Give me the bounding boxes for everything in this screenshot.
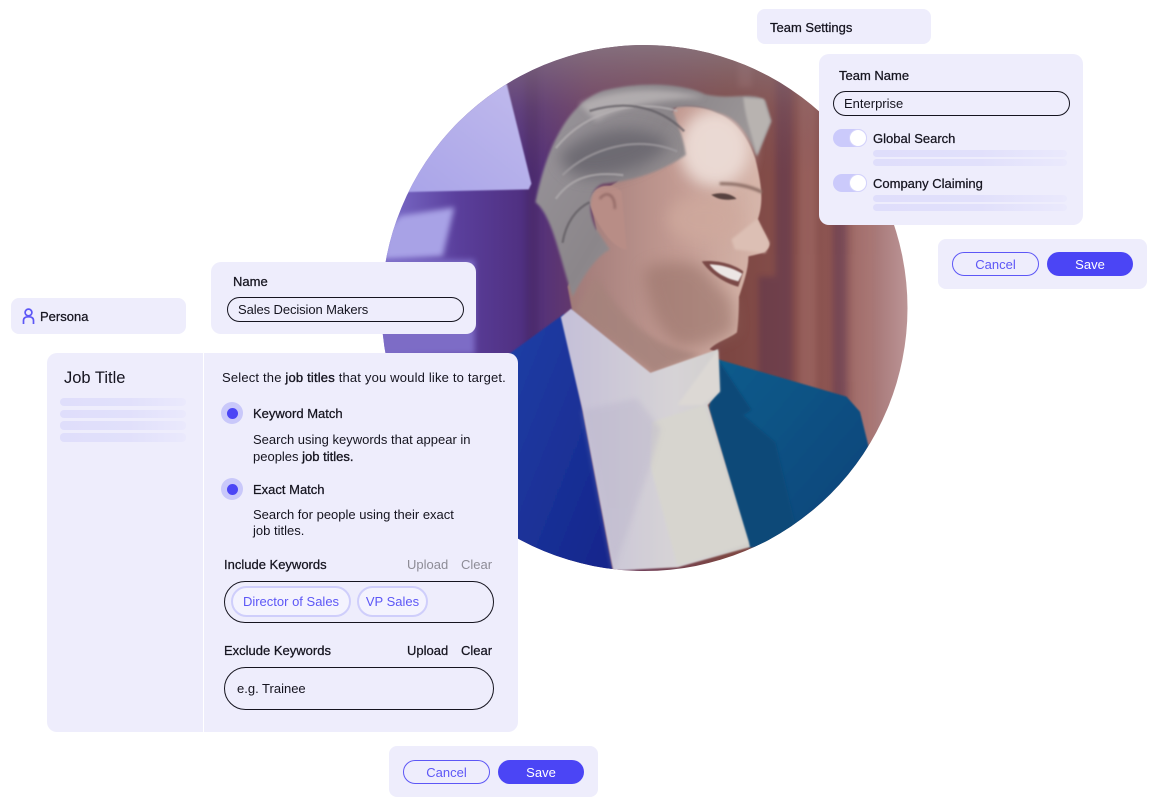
photo: smiling man in blue blazer: [382, 45, 908, 571]
label: team name: Team Name: [839, 68, 909, 83]
placeholder bars: company claiming: [873, 195, 1028, 211]
label: include keywords: Include Keywords: [224, 557, 327, 572]
cheek glow: [672, 208, 689, 230]
label: exclude keywords: Exclude Keywords: [224, 643, 331, 658]
toggle: company claiming: [833, 174, 867, 192]
description: keyword match: [253, 432, 471, 464]
description: keyword match: peoples job titles.: [253, 449, 353, 464]
button: save: [498, 760, 584, 784]
label: name: Name: [233, 274, 268, 289]
action: clear disabled: Clear: [461, 557, 492, 572]
panel: team settings tab: [757, 9, 931, 44]
radio: exact match: [221, 478, 243, 500]
instruction text: Select the job titles that you would like to target.: [222, 370, 506, 385]
label: keyword match: Keyword Match: [253, 406, 343, 421]
button: cancel: [403, 760, 490, 784]
button: cancel: [952, 252, 1039, 276]
description: exact match: job titles.: [253, 523, 304, 538]
hair: [535, 85, 771, 297]
panel: team actions: [938, 239, 1147, 289]
button: save: Save: [526, 765, 556, 780]
panel: persona actions: [389, 746, 598, 797]
action: upload: Upload: [407, 643, 448, 658]
ear: [590, 185, 616, 244]
forehead highlight: [679, 109, 750, 187]
panel: job title form: [47, 353, 518, 732]
action: upload disabled: Upload: [407, 557, 448, 572]
description: exact match: Search for people using their exact: [253, 507, 454, 522]
input: sales decision makers: [227, 297, 464, 322]
heading: team settings: Team Settings: [770, 20, 852, 35]
description: exact match: [252, 507, 454, 538]
lamp shade: [394, 84, 531, 192]
right jacket: [710, 359, 868, 547]
panel: team name form: [819, 54, 1083, 225]
panel: persona tab: [11, 298, 186, 334]
placeholder bars: job title: [60, 398, 160, 442]
button: save: Save: [1075, 257, 1105, 272]
toggle: global search: [833, 129, 867, 147]
button: save: [1047, 252, 1133, 276]
chip: vp sales: [357, 586, 428, 617]
input: exclude keywords: e.g. Trainee: [237, 681, 306, 696]
head and neck: [568, 106, 769, 378]
label: persona: Persona: [40, 309, 88, 324]
divider column: [203, 353, 204, 732]
nose: [732, 219, 769, 253]
icon: person: [22, 308, 34, 324]
description: keyword match: Search using keywords that appear in: [253, 432, 471, 447]
shadow under jaw: [614, 311, 697, 371]
chip: vp sales: VP Sales: [366, 594, 419, 609]
input: sales decision makers: Sales Decision Makers: [238, 302, 368, 317]
label: company claiming: Company Claiming: [873, 176, 983, 191]
action: clear: Clear: [461, 643, 492, 658]
placeholder bars: global search: [873, 150, 1028, 166]
brow and eye: [720, 184, 762, 192]
left lapel: [508, 314, 613, 574]
lamp base: [383, 207, 454, 260]
chip: director of sales: Director of Sales: [243, 594, 339, 609]
label: exact match: Exact Match: [253, 482, 325, 497]
shirt: [561, 309, 750, 571]
chip: director of sales: [231, 586, 351, 617]
radio: keyword match: [221, 402, 243, 424]
input: exclude keywords: [224, 667, 494, 710]
label: global search: Global Search: [873, 131, 955, 146]
input: enterprise: [833, 91, 1070, 116]
panel: name field: [211, 262, 476, 334]
button: cancel: Cancel: [426, 765, 467, 780]
input: include keywords: [224, 581, 494, 623]
heading: job title: Job Title: [64, 369, 125, 387]
input: enterprise: Enterprise: [844, 96, 903, 111]
stubble jaw: [644, 262, 735, 347]
button: cancel: Cancel: [975, 257, 1016, 272]
mouth: [702, 261, 743, 287]
